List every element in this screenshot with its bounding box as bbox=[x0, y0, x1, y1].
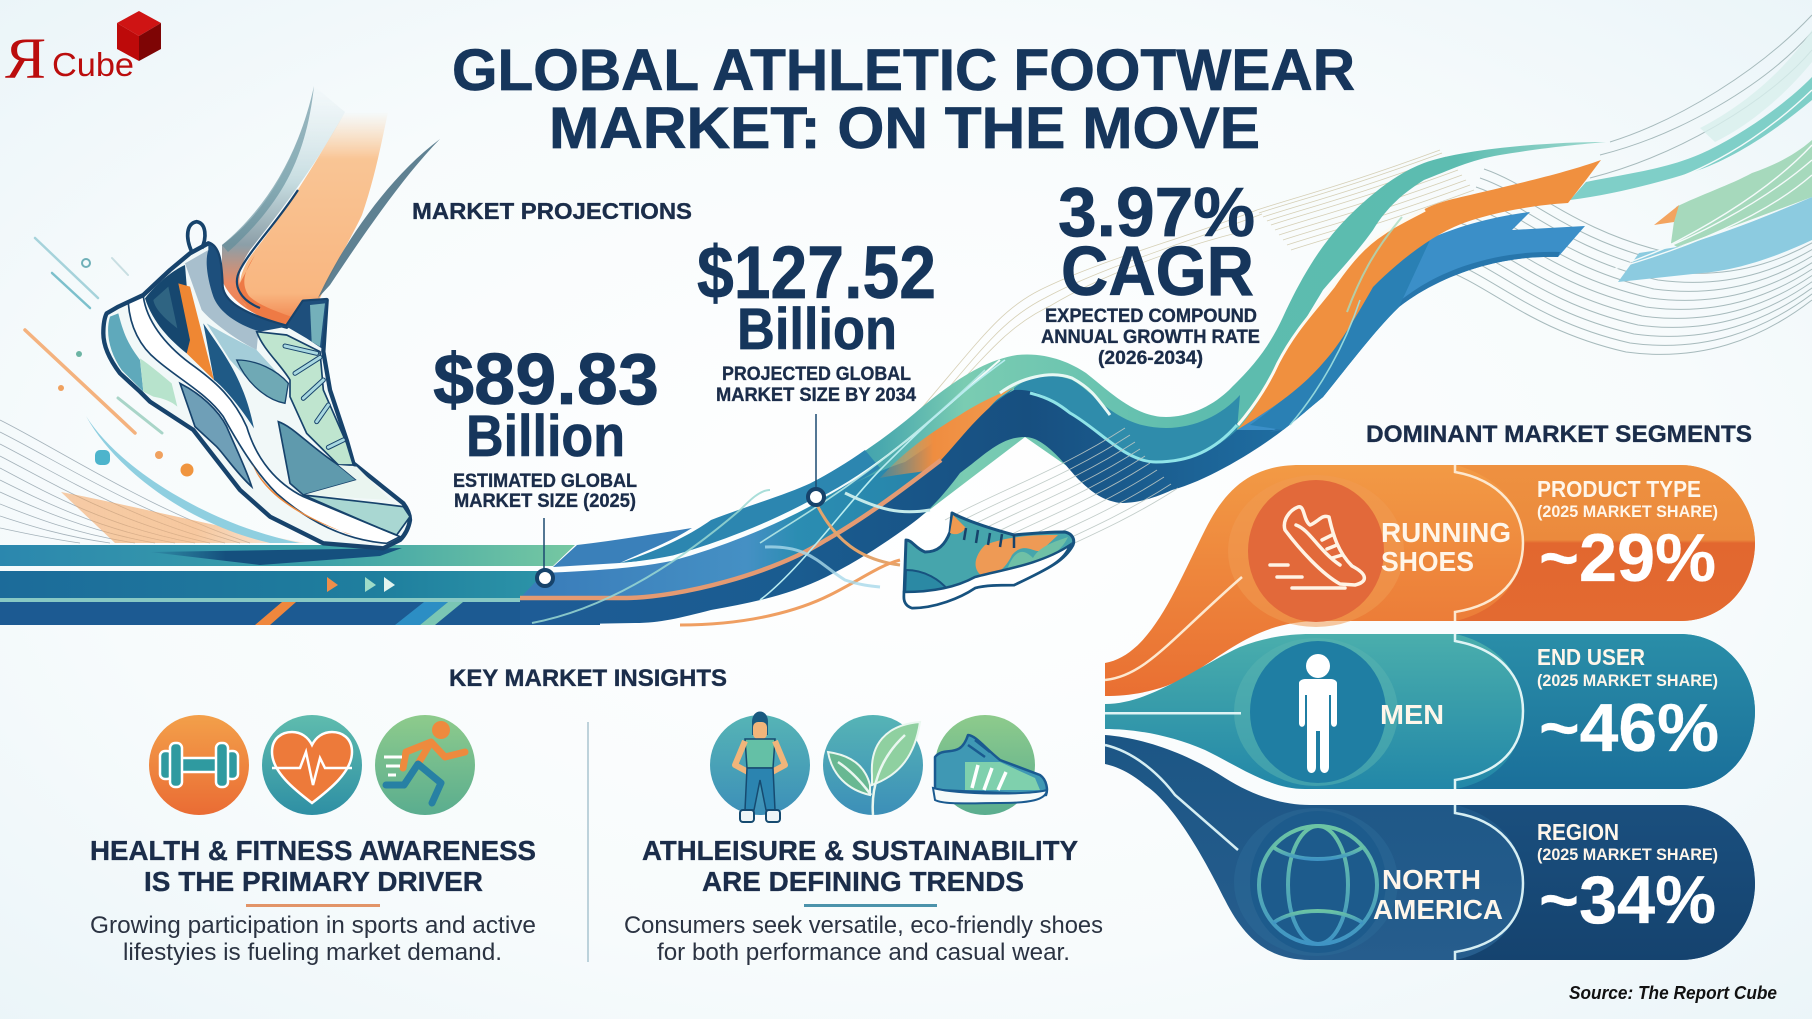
title: GLOBAL ATHLETIC FOOTWEAR bbox=[452, 38, 1355, 103]
heading: athleisure and sustainability: ATHLEISURE & SUSTAINABILITY bbox=[642, 835, 1078, 866]
running shoe illustration bbox=[103, 222, 410, 548]
panel: north america segment bbox=[1105, 735, 1755, 960]
orange sole accent bbox=[250, 460, 353, 535]
decorative hatch lines below the wave bbox=[945, 428, 1178, 580]
stat: region share: (2025 MARKET SHARE) bbox=[1537, 845, 1718, 864]
heading: health and fitness: HEALTH & FITNESS AWARENESS bbox=[90, 835, 536, 866]
eyestay bbox=[257, 332, 353, 465]
navy heel panel bbox=[145, 265, 192, 353]
wave highlight lines bbox=[520, 210, 1425, 625]
label: north america: AMERICA bbox=[1373, 894, 1503, 925]
right-edge ribbon fragments bbox=[1570, 30, 1812, 282]
description: health and fitness: lifestyies is fueling market demand. bbox=[123, 939, 502, 966]
title bbox=[452, 38, 1355, 161]
label: running shoes: RUNNING bbox=[1381, 517, 1511, 548]
description: athleisure and sustainability bbox=[624, 912, 1103, 966]
label: running shoes: SHOES bbox=[1381, 546, 1474, 577]
label: north america: NORTH bbox=[1382, 864, 1481, 895]
shoe body bbox=[103, 243, 410, 548]
logo word: Cube bbox=[52, 46, 134, 83]
panel: running shoes segment bbox=[1105, 465, 1755, 696]
stat: 2034 market size: $127.52 bbox=[697, 231, 936, 314]
stat: 2034 market size bbox=[697, 231, 936, 406]
icon: heart with pulse bbox=[262, 715, 362, 815]
orange connector and pill bbox=[1105, 465, 1755, 696]
heading: health and fitness bbox=[90, 835, 536, 897]
outer heel sole bbox=[108, 313, 143, 392]
heading: market projections: MARKET PROJECTIONS bbox=[412, 198, 692, 224]
description: athleisure and sustainability: Consumers seek versatile, eco-friendly shoes bbox=[624, 912, 1103, 939]
orange stripe bbox=[178, 283, 214, 380]
leg silhouette bbox=[222, 86, 440, 327]
heading: health and fitness: IS THE PRIMARY DRIVER bbox=[144, 866, 483, 897]
stat: CAGR: CAGR bbox=[1061, 232, 1254, 310]
toe panels bbox=[278, 422, 357, 495]
stat: CAGR: EXPECTED COMPOUND bbox=[1045, 306, 1257, 327]
heading: dominant market segments: DOMINANT MARKET SEGMENTS bbox=[1366, 421, 1752, 448]
stat: end user share: ~46% bbox=[1539, 690, 1719, 766]
label: running shoes bbox=[1381, 517, 1511, 577]
stat: 2034 market size: PROJECTED GLOBAL bbox=[722, 364, 911, 385]
icon: leaf bbox=[823, 715, 923, 815]
navy diagonal bbox=[203, 323, 254, 428]
midsole bbox=[128, 297, 400, 543]
stat: 2025 market size bbox=[433, 340, 659, 512]
pull tab bbox=[188, 222, 205, 252]
orange swoosh under shoe bbox=[61, 492, 306, 543]
decorative line fan, peach above wave bbox=[920, 150, 1474, 410]
label: men: MEN bbox=[1380, 699, 1444, 730]
stat: region share bbox=[1537, 819, 1718, 938]
marker: 2025 bbox=[537, 518, 553, 586]
stat: product type share: (2025 MARKET SHARE) bbox=[1537, 502, 1718, 521]
stat: product type share: ~29% bbox=[1539, 520, 1716, 596]
tongue bbox=[287, 300, 327, 348]
icon: globe bbox=[1259, 826, 1377, 944]
stat: CAGR: (2026-2034) bbox=[1098, 348, 1203, 369]
logo cube bbox=[117, 11, 161, 61]
decorative line fan, top right bbox=[1440, 15, 1812, 354]
logo letter R: Я bbox=[5, 26, 46, 91]
stat: region share: ~34% bbox=[1539, 862, 1716, 938]
label: north america bbox=[1373, 864, 1503, 925]
ground track band bbox=[0, 545, 600, 625]
blue swoosh under shoe bbox=[86, 416, 300, 543]
icon: man bbox=[1299, 654, 1337, 773]
heading: key market insights: KEY MARKET INSIGHTS bbox=[449, 665, 727, 692]
stat: end user share bbox=[1537, 644, 1719, 766]
logo bbox=[5, 11, 161, 91]
stat: 2025 market size: MARKET SIZE (2025) bbox=[454, 491, 636, 512]
collar panels bbox=[185, 250, 258, 350]
stat: region share: REGION bbox=[1537, 819, 1619, 845]
stat: CAGR: 3.97% bbox=[1058, 173, 1255, 251]
marker: 2034 bbox=[808, 414, 824, 505]
icon: standing athlete bbox=[710, 712, 810, 822]
stat: 2025 market size: $89.83 bbox=[433, 340, 659, 420]
navy connector and pill bbox=[1105, 735, 1755, 960]
icon: dumbbell bbox=[149, 715, 249, 815]
title: MARKET: ON THE MOVE bbox=[549, 96, 1260, 161]
growth wave ribbons bbox=[520, 142, 1606, 625]
description: athleisure and sustainability: for both performance and casual wear. bbox=[657, 939, 1070, 966]
heading: athleisure and sustainability bbox=[642, 835, 1078, 897]
icon: running shoe outline bbox=[1270, 507, 1364, 588]
decorative speed lines, lower left bbox=[0, 420, 250, 543]
stat: product type share: PRODUCT TYPE bbox=[1537, 476, 1701, 502]
heading: athleisure and sustainability: ARE DEFINING TRENDS bbox=[702, 866, 1024, 897]
panel: athleisure and sustainability bbox=[624, 712, 1103, 966]
stat: 2025 market size: Billion bbox=[466, 404, 625, 469]
description: health and fitness bbox=[90, 912, 536, 966]
laces bbox=[285, 346, 343, 447]
panel: health and fitness bbox=[90, 715, 536, 966]
icon: runner bbox=[375, 715, 475, 815]
stat: end user share: END USER bbox=[1537, 644, 1645, 670]
stat: 2025 market size: ESTIMATED GLOBAL bbox=[453, 471, 637, 492]
source note: Source: The Report Cube bbox=[1569, 983, 1777, 1003]
track arrows bbox=[327, 577, 395, 592]
panel: men segment bbox=[1105, 634, 1755, 789]
teal connector and pill bbox=[1105, 634, 1755, 789]
description: health and fitness: Growing participation in sports and active bbox=[90, 912, 536, 939]
motion marks beside shoe bbox=[25, 238, 194, 476]
stat: 2034 market size: Billion bbox=[737, 297, 897, 362]
stat: end user share: (2025 MARKET SHARE) bbox=[1537, 671, 1718, 690]
icon: sneaker bbox=[933, 715, 1047, 815]
small running shoe illustration bbox=[904, 513, 1074, 608]
stat: CAGR bbox=[1041, 173, 1260, 369]
upper side panels bbox=[207, 323, 288, 403]
stat: product type share bbox=[1537, 476, 1718, 596]
stat: 2034 market size: MARKET SIZE BY 2034 bbox=[716, 385, 916, 406]
stat: CAGR: ANNUAL GROWTH RATE bbox=[1041, 327, 1260, 348]
